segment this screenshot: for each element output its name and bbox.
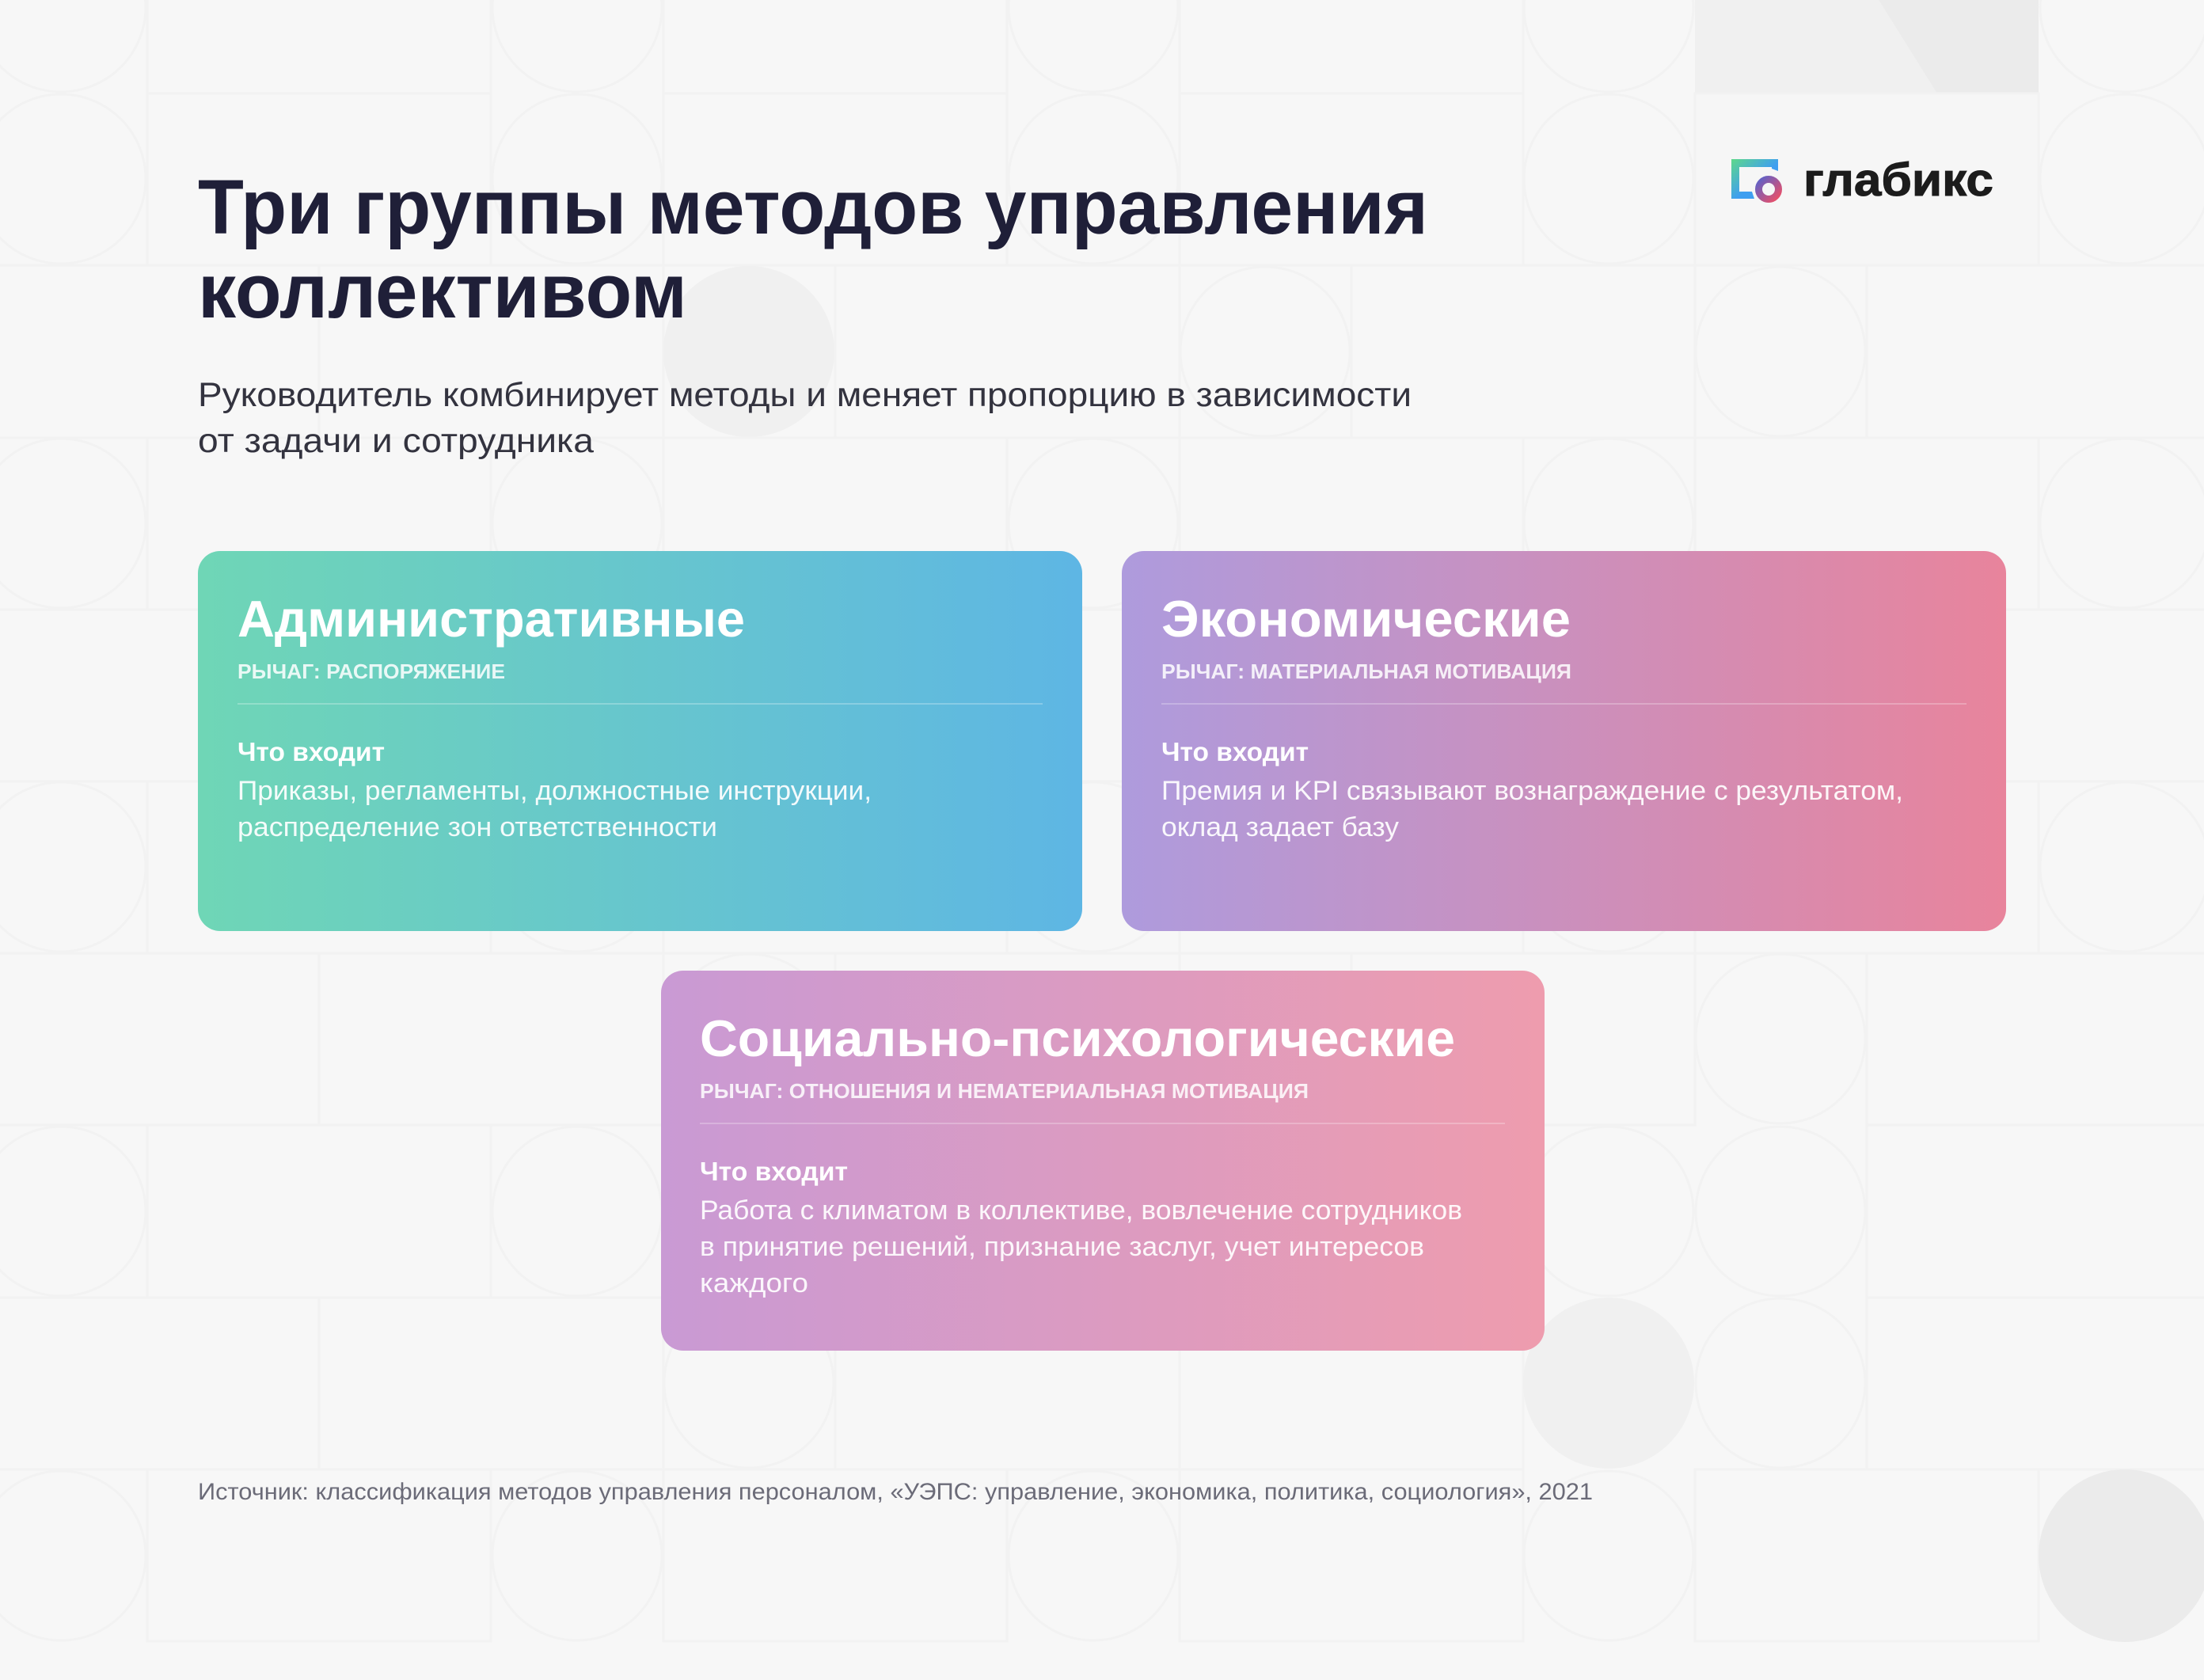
card heading: Экономические bbox=[1161, 590, 1571, 648]
body text: Приказы, регламенты, должностные инструкции, bbox=[238, 776, 872, 806]
lever label: РЫЧАГ: ОТНОШЕНИЯ И НЕМАТЕРИАЛЬНАЯ МОТИВАЦИЯ bbox=[700, 1079, 1309, 1103]
body text bbox=[238, 776, 872, 842]
title: Три группы методов управления bbox=[198, 164, 1428, 250]
card heading: Социально-психологические bbox=[700, 1009, 1455, 1067]
title: коллективом bbox=[198, 248, 687, 334]
lever label: РЫЧАГ: МАТЕРИАЛЬНАЯ МОТИВАЦИЯ bbox=[1161, 659, 1571, 683]
source note: Источник: классификация методов управления персоналом, «УЭПС: управление, экономика, политика, социология», 2021 bbox=[198, 1479, 1593, 1505]
subtitle: от задачи и сотрудника bbox=[198, 422, 594, 460]
logo wordmark: глабикс bbox=[1803, 154, 1993, 206]
title bbox=[198, 164, 1428, 334]
subtitle: Руководитель комбинирует методы и меняет пропорцию в зависимости bbox=[198, 376, 1412, 414]
icon: logo mark bbox=[1731, 159, 1784, 204]
body text bbox=[1161, 776, 1903, 842]
subheading: Что входит bbox=[1161, 737, 1309, 766]
body text: распределение зон ответственности bbox=[238, 812, 717, 842]
body text: Работа с климатом в коллективе, вовлечение сотрудников bbox=[700, 1195, 1462, 1226]
body text: Премия и KPI связывают вознаграждение с результатом, bbox=[1161, 776, 1903, 806]
panel: economic methods bbox=[1122, 551, 2006, 931]
body text: каждого bbox=[700, 1268, 808, 1298]
lever label: РЫЧАГ: РАСПОРЯЖЕНИЕ bbox=[238, 659, 505, 683]
body text: оклад задает базу bbox=[1161, 812, 1399, 842]
body text bbox=[700, 1195, 1462, 1298]
panel: administrative methods bbox=[198, 551, 1082, 931]
subheading: Что входит bbox=[700, 1157, 848, 1186]
subheading: Что входит bbox=[238, 737, 385, 766]
logo bbox=[1731, 154, 1993, 206]
body text: в принятие решений, признание заслуг, учет интересов bbox=[700, 1232, 1424, 1262]
subtitle bbox=[198, 376, 1412, 460]
card heading: Административные bbox=[238, 590, 745, 648]
panel: socio-psychological methods bbox=[661, 971, 1545, 1351]
